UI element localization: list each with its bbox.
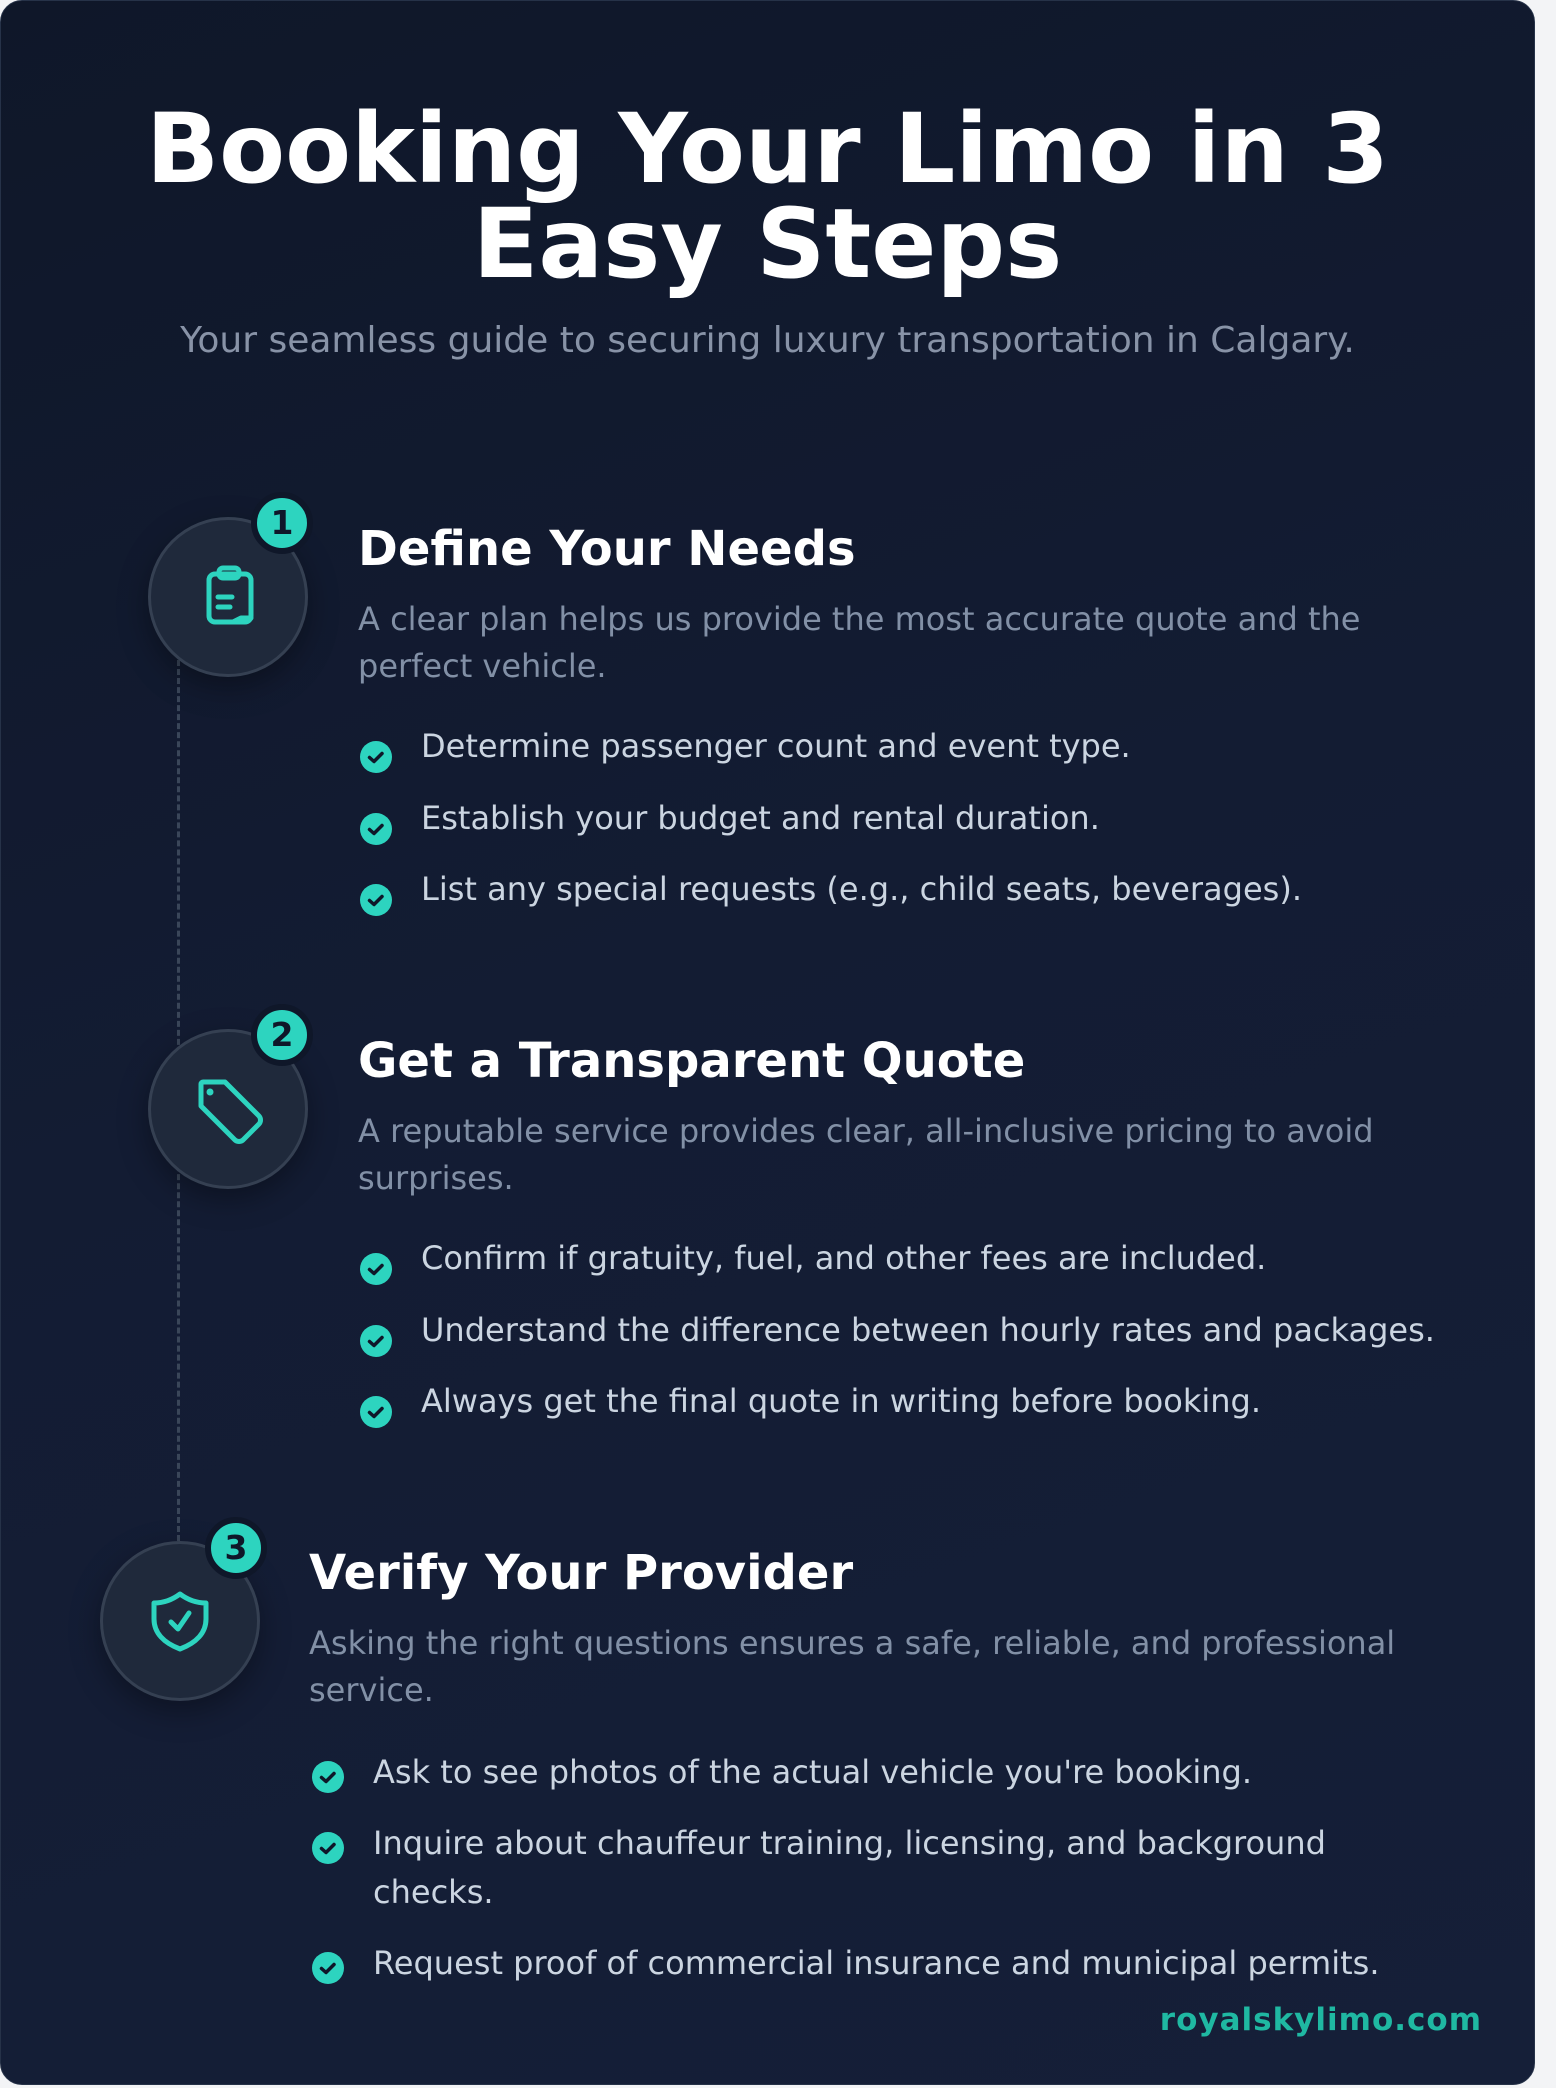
step 1 description: A clear plan helps us provide the most accurate quote and the [358, 600, 1360, 638]
step 3 description [309, 1624, 1395, 1709]
step 2 badge: 2 [271, 1015, 293, 1054]
timeline dashed line [177, 651, 180, 1541]
step 2 bullets: Always get the final quote in writing before booking. [421, 1382, 1261, 1420]
step 3 bullets: Inquire about chauffeur training, licensing, and background [373, 1824, 1326, 1862]
step 2 bullets: Confirm if gratuity, fuel, and other fees are included. [421, 1239, 1266, 1277]
subtitle: Your seamless guide to securing luxury transportation in Calgary. [180, 320, 1355, 361]
step 3 description: service. [309, 1671, 434, 1709]
step 3 bullets [312, 1753, 1379, 1984]
step 1 bullets: List any special requests (e.g., child seats, beverages). [421, 870, 1302, 908]
step 3 badge: 3 [225, 1528, 247, 1567]
step 2 badge [251, 1004, 313, 1066]
step 1 badge [251, 492, 313, 554]
step 1 description: perfect vehicle. [358, 647, 607, 685]
title: Booking Your Limo in 3 [146, 93, 1389, 205]
step 1 badge: 1 [271, 503, 293, 542]
step 3 icon: shield check [100, 1541, 260, 1701]
footer url: royalskylimo.com [1160, 2002, 1482, 2038]
step 2 description [358, 1112, 1374, 1197]
step 1 heading: Define Your Needs [358, 521, 856, 577]
step 2 heading: Get a Transparent Quote [358, 1033, 1025, 1089]
title [146, 93, 1389, 300]
step 3 heading: Verify Your Provider [309, 1545, 853, 1601]
step 1 bullets [360, 727, 1302, 916]
step 1 bullets: Establish your budget and rental duration. [421, 799, 1100, 837]
step 2 description: A reputable service provides clear, all-inclusive pricing to avoid [358, 1112, 1374, 1150]
step 3 badge [205, 1517, 267, 1579]
title: Easy Steps [473, 188, 1062, 300]
step 2 bullets [360, 1239, 1435, 1428]
step 3 bullets: Ask to see photos of the actual vehicle you're booking. [373, 1753, 1252, 1791]
step 2 icon: tag [148, 1029, 308, 1189]
step 1 icon: clipboard [148, 517, 308, 677]
step 3 description: Asking the right questions ensures a safe, reliable, and professional [309, 1624, 1395, 1662]
step 2 bullets: Understand the difference between hourly rates and packages. [421, 1311, 1435, 1349]
step 3 bullets: checks. [373, 1873, 494, 1911]
step 2 description: surprises. [358, 1159, 514, 1197]
step 1 bullets: Determine passenger count and event type. [421, 727, 1131, 765]
step 1 description [358, 600, 1360, 685]
step 3 bullets: Request proof of commercial insurance and municipal permits. [373, 1944, 1379, 1982]
